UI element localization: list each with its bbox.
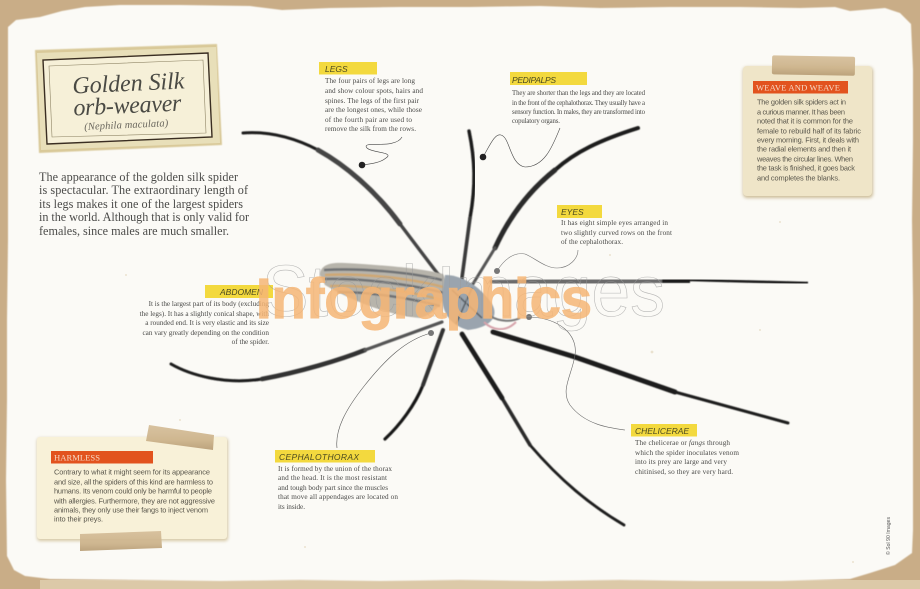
harmless heading: [51, 451, 153, 464]
callout: abdomen: [140, 285, 273, 346]
intro text: The appearance of the golden silk spider: [39, 170, 238, 184]
chelicerae text: The chelicerae or fangs through: [635, 439, 730, 447]
abdomen heading: ABDOMEN: [219, 287, 264, 297]
cephalothorax text: It is formed by the union of the thorax: [278, 465, 392, 473]
weave text: female to rebuild half of its fabric: [757, 126, 861, 136]
callout: pedipalps: [510, 72, 646, 125]
title text line two: orb-weaver: [73, 91, 183, 121]
cephalothorax text: and the head. It is the most resistant: [278, 474, 387, 482]
chelicerae: [484, 316, 520, 329]
harmless text: animals, they only use their fangs to inject venom: [54, 506, 208, 514]
weave text: [756, 98, 861, 182]
tape: [772, 55, 855, 76]
abdomen text: the legs). It has a slightly conical shape, with: [140, 310, 269, 318]
credit: © Sol 90 Images: [885, 516, 892, 555]
abdomen: [320, 263, 446, 318]
weave heading: WEAVE AND WEAVE: [756, 82, 840, 92]
harmless heading: HARMLESS: [54, 452, 100, 462]
connector: eyes: [494, 250, 578, 274]
eyes text: two slightly curved rows on the front: [561, 229, 672, 237]
weave text: The golden silk spiders act in: [757, 98, 846, 106]
leg seven lower centre left: [385, 330, 443, 439]
callout: legs: [319, 62, 423, 133]
weave text: weaves the circular lines. When: [756, 154, 853, 164]
paper specks: [125, 221, 854, 563]
watermark orange: Infographics: [256, 267, 592, 331]
eyes heading: EYES: [561, 207, 584, 217]
pedipalps heading: PEDIPALPS: [512, 75, 556, 85]
pedipalps text: [512, 90, 646, 125]
callout: cephalothorax: [275, 450, 398, 511]
harmless text: Contrary to what it might seem for its appearance: [54, 468, 210, 476]
panel: harmless: [37, 425, 228, 551]
chelicerae text: which the spider inoculates venom: [635, 449, 739, 457]
legs text: and show colour spots, hairs and: [325, 87, 423, 95]
harmless text: with allergies. Furthermore, they are not aggressive: [53, 496, 215, 506]
cephalothorax text: that move all appendages are located on: [278, 493, 398, 501]
title text: Golden Silk: [72, 68, 185, 99]
legs text: are the longest ones, while those: [325, 106, 422, 114]
cephalothorax: [442, 275, 495, 330]
harmless text: into their preys.: [54, 514, 103, 524]
leg one upper left: [243, 133, 450, 290]
harmless text: [53, 468, 215, 524]
chelicerae text: into its prey are large and very: [635, 458, 727, 466]
connector: pedipalps: [480, 128, 560, 167]
intro text: in the world. Although that is only valid for: [39, 210, 249, 224]
legs text: [325, 77, 423, 133]
leg two top centre: [461, 131, 474, 285]
weave text: a curious manner. It has been: [757, 108, 845, 116]
intro text: [39, 170, 249, 238]
abdomen text: a rounded end. It is very elastic and its size: [145, 319, 269, 327]
weave text: noted that it is common for the: [757, 116, 853, 126]
weave text: and completes the blanks.: [757, 174, 840, 182]
eyes text: of the cephalothorax.: [561, 238, 623, 246]
legs text: The four pairs of legs are long: [325, 77, 415, 85]
legs text: remove the silk from the rows.: [325, 125, 416, 133]
connector: chelicerae: [526, 314, 625, 430]
leg five lower right: [493, 332, 788, 423]
panel: weave and weave: [743, 55, 873, 198]
abdomen text: of the spider.: [232, 338, 269, 346]
connector: cephalothorax: [337, 330, 434, 448]
callout: chelicerae: [631, 424, 739, 476]
eyes text: [561, 219, 672, 246]
pedipalps text: copulatory organs.: [512, 118, 560, 125]
spider: [171, 128, 808, 525]
weave text: every morning. First, it deals with: [757, 136, 859, 144]
watermark outline: StockImages: [262, 252, 665, 332]
cephalothorax text: its inside.: [278, 503, 305, 511]
legs text: spines. The legs of the first pair: [325, 97, 420, 105]
cephalothorax heading: CEPHALOTHORAX: [279, 452, 359, 462]
harmless text: humans. Its venom could only be harmful to people: [54, 486, 212, 496]
chelicerae text: [635, 439, 739, 476]
pedipalps text: sensory function. In males, they are transformed into: [512, 109, 646, 116]
bottom tape: [80, 531, 162, 551]
leg eight lower left: [171, 322, 442, 381]
cephalothorax text: and tough body part since the muscles: [278, 484, 388, 492]
pedipalps text: They are shorter than the legs and they are located: [512, 90, 646, 97]
eyes text: It has eight simple eyes arranged in: [561, 219, 668, 227]
legs text: of the fourth pair are used to: [325, 116, 412, 124]
scientific name: (Nephila maculata): [84, 118, 169, 133]
connector: legs: [359, 137, 402, 168]
chelicerae text: chitinised, so they are very hard.: [635, 468, 733, 476]
leg six lower centre right: [462, 334, 624, 525]
leg four right: [490, 280, 808, 283]
intro text: is spectacular. The extraordinary length of: [39, 183, 249, 197]
pedipalps text: in the front of the cephalothorax. They usually have a: [512, 100, 645, 107]
leg three upper right: [468, 128, 638, 292]
cephalothorax text: [278, 465, 398, 511]
weave text: the task is finished, it goes back: [757, 164, 855, 172]
top tape: [146, 425, 214, 450]
abdomen text: It is the largest part of its body (excluding: [149, 300, 269, 308]
callout: eyes: [557, 205, 672, 246]
legs heading: LEGS: [325, 64, 348, 74]
harmless text: and size, all the spiders of this kind are harmless to: [54, 478, 213, 486]
intro text: its legs makes it one of the largest spiders: [39, 197, 243, 211]
intro text: females, since males are much smaller.: [39, 224, 229, 238]
abdomen text: [140, 300, 269, 346]
weave text: the radial elements and then it: [757, 144, 851, 154]
abdomen text: can vary greatly depending on the condition: [142, 329, 269, 337]
chelicerae heading: CHELICERAE: [635, 426, 689, 436]
title label: [35, 44, 222, 153]
